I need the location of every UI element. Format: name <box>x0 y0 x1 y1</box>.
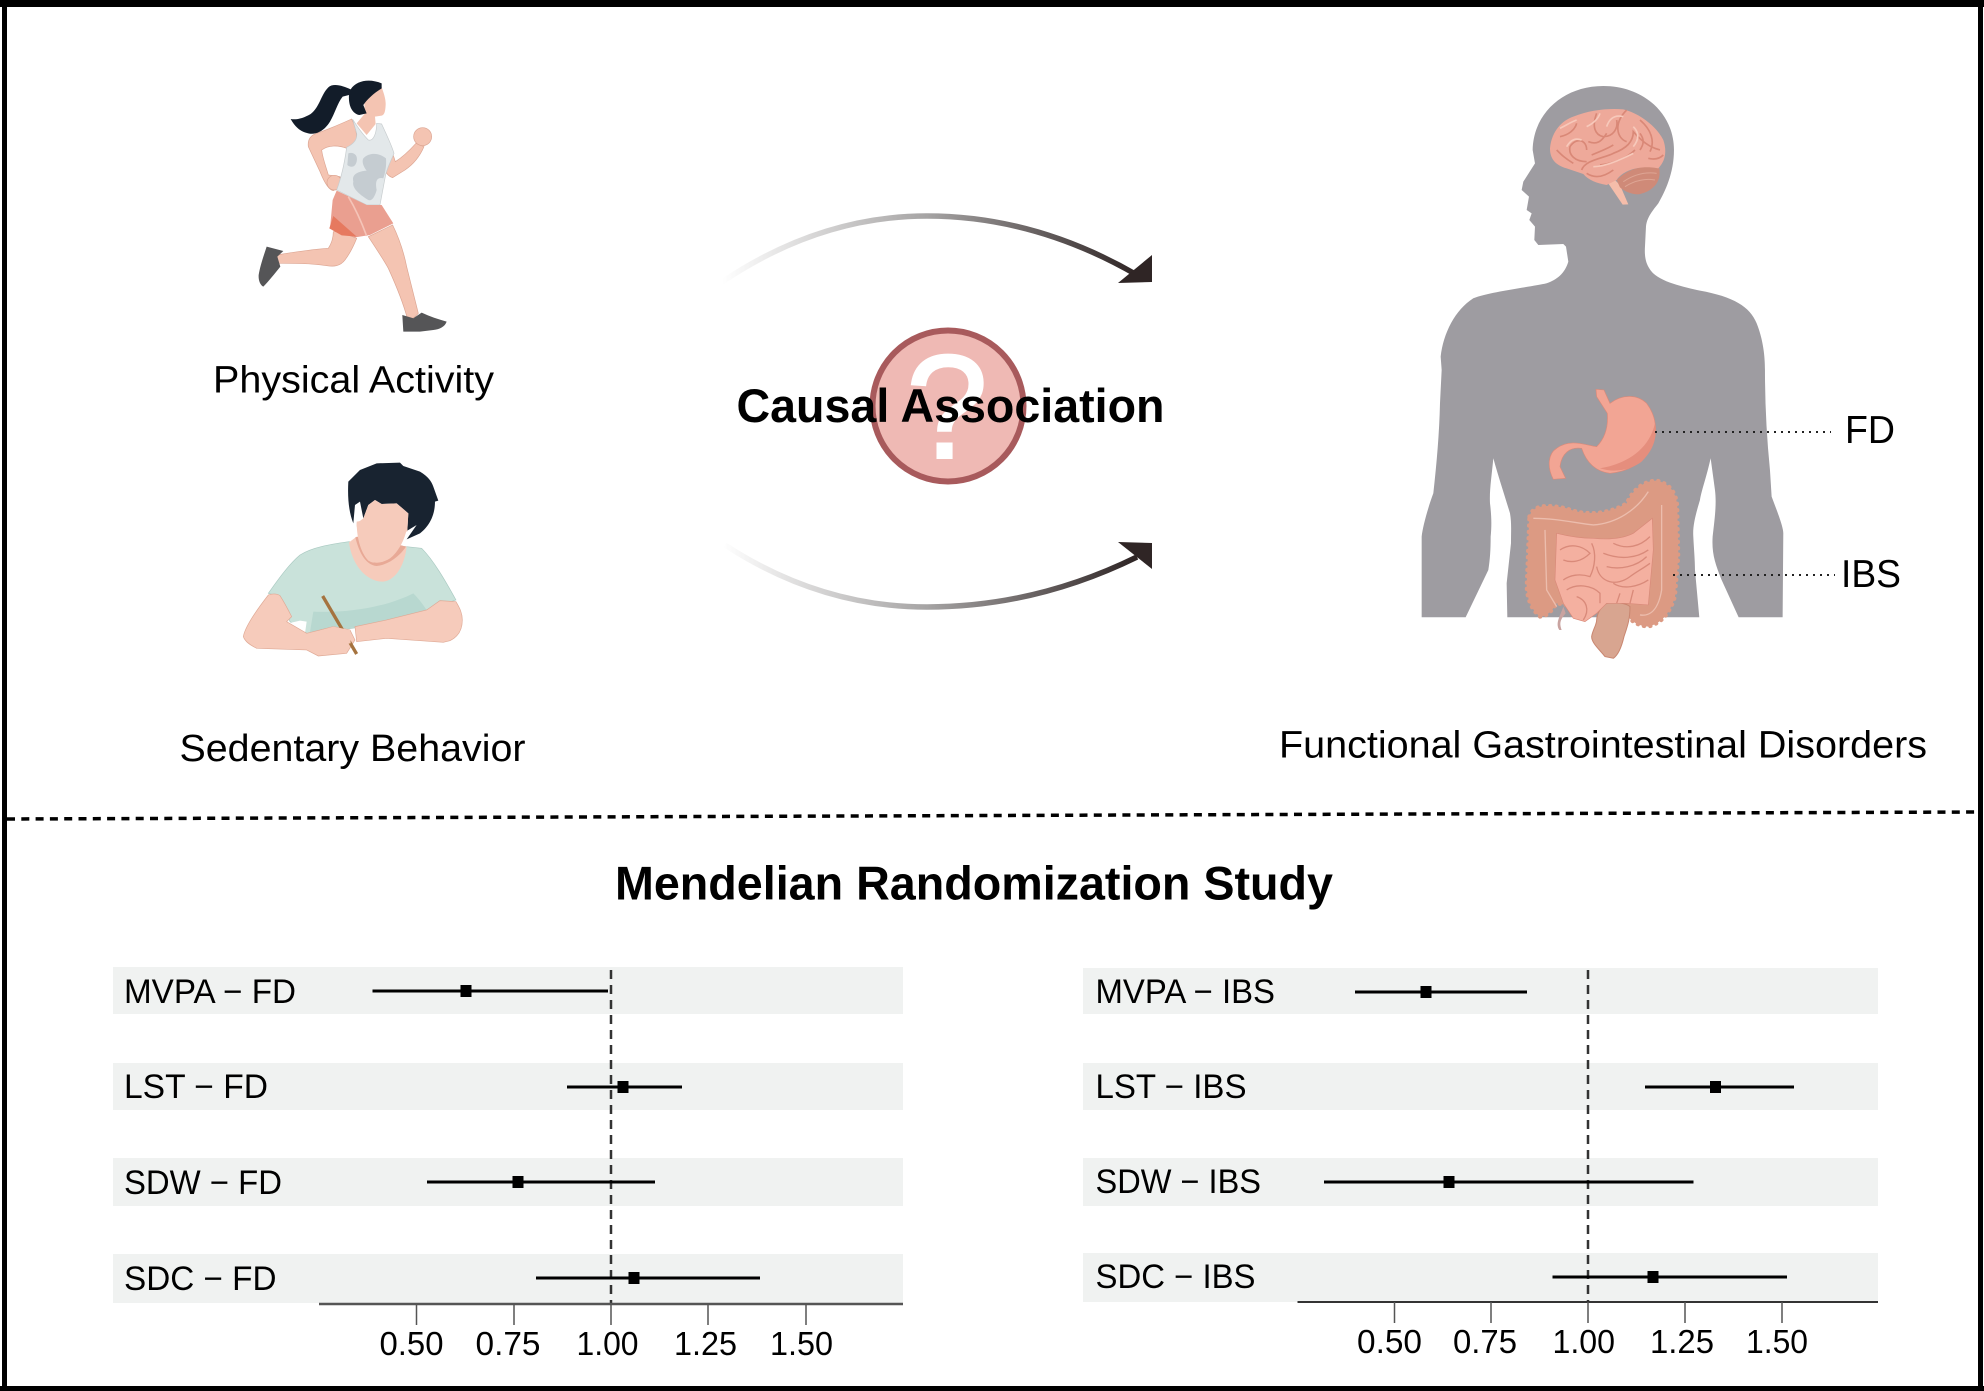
axis labels: IBS: 0.75 <box>1453 1323 1517 1360</box>
row: MVPA - IBS <box>1096 973 1527 1011</box>
label: Sedentary Behavior: Sedentary Behavior <box>180 728 526 770</box>
row: MVPA - IBS: MVPA − IBS <box>1096 973 1275 1011</box>
forest plot: IBS <box>1083 968 1878 1360</box>
axis labels: FD: 0.50 <box>380 1325 444 1362</box>
axis labels: FD: 1.25 <box>674 1325 737 1362</box>
stomach <box>1549 389 1656 479</box>
row: SDC - FD <box>124 1260 760 1298</box>
intestines <box>1527 481 1678 658</box>
row: LST - FD: LST − FD <box>124 1068 268 1106</box>
row: SDC - FD: SDC − FD <box>124 1260 276 1298</box>
row: SDC - IBS <box>1096 1258 1787 1296</box>
row: SDW - IBS: SDW − IBS <box>1096 1163 1261 1201</box>
arrow: lower curved arrow <box>725 542 1152 607</box>
axis labels: IBS: 1.00 <box>1552 1323 1615 1360</box>
row: SDW - IBS <box>1096 1163 1694 1201</box>
row: MVPA - FD: MVPA − FD <box>124 973 296 1011</box>
axis labels: IBS: 1.25 <box>1650 1323 1714 1360</box>
axis labels: FD: 1.00 <box>576 1325 638 1362</box>
label: Functional Gastrointestinal Disorders: Functional Gastrointestinal Disorders <box>1279 724 1927 766</box>
axis labels: IBS: 0.50 <box>1357 1323 1422 1360</box>
row: SDW - FD: SDW − FD <box>124 1164 282 1202</box>
icon: running woman <box>259 81 447 332</box>
callout line: FD <box>1655 431 1831 433</box>
row: LST - FD <box>124 1068 682 1106</box>
row: LST - IBS <box>1096 1068 1794 1106</box>
heading: Mendelian Randomization Study: Mendelian Randomization Study <box>615 856 1333 910</box>
brain <box>1550 109 1665 205</box>
row: SDW - FD <box>124 1164 655 1202</box>
axis labels: FD: 1.50 <box>770 1325 833 1362</box>
forest plot: FD <box>113 967 903 1362</box>
row: LST - IBS: LST − IBS <box>1096 1068 1246 1106</box>
axis labels: FD: 0.75 <box>476 1325 540 1362</box>
label: IBS: IBS <box>1841 553 1901 596</box>
axis labels: IBS: 1.50 <box>1746 1323 1808 1360</box>
callout line: IBS <box>1673 574 1835 576</box>
body silhouette <box>1422 86 1783 617</box>
row: MVPA - FD <box>124 973 608 1011</box>
icon: question mark circle <box>872 325 1024 490</box>
icon: person writing at desk <box>243 463 462 656</box>
axis labels: IBS <box>1357 1323 1808 1360</box>
heading: Causal Association: Causal Association <box>736 379 1164 432</box>
arrow: upper curved arrow <box>722 216 1152 283</box>
label: FD: FD <box>1845 409 1895 452</box>
row: SDC - IBS: SDC − IBS <box>1096 1258 1256 1296</box>
label: Physical Activity: Physical Activity <box>213 360 494 402</box>
axis labels: FD <box>380 1325 833 1362</box>
icon: body with organs <box>1422 86 1783 658</box>
icon: question mark circle: ? <box>906 325 988 490</box>
